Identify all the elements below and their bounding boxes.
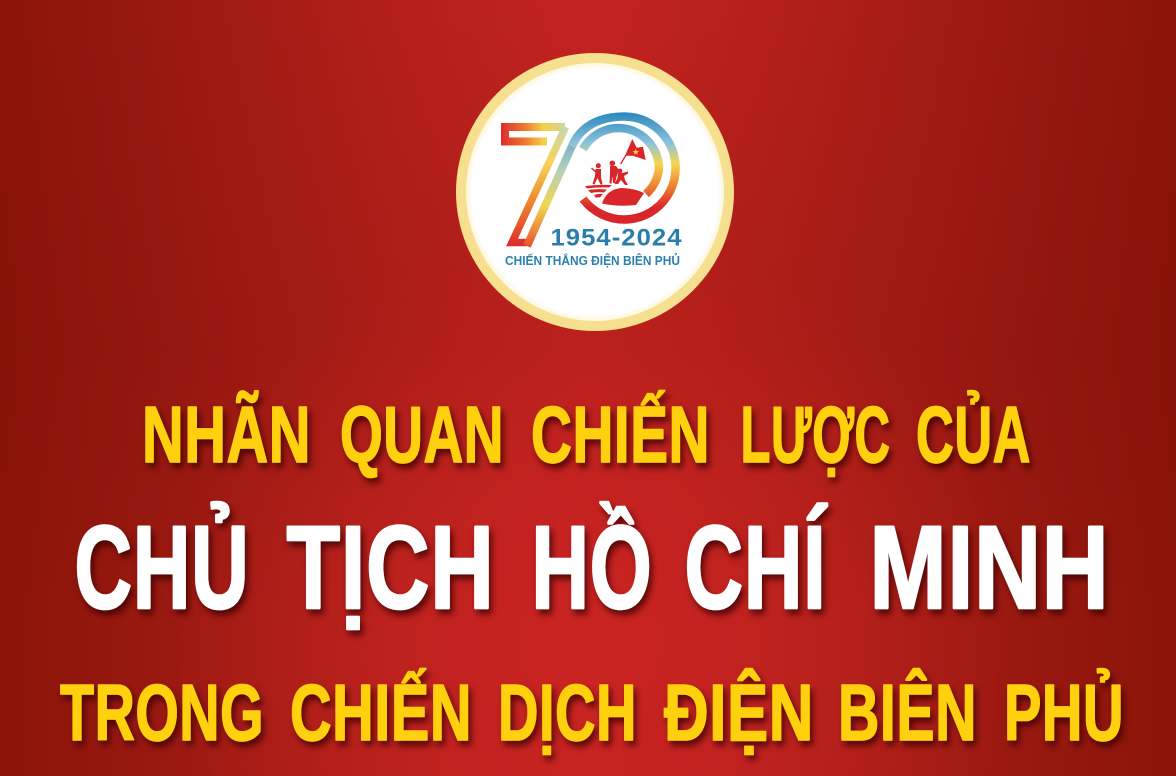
title line 3: TRONG (60, 668, 264, 757)
title line 2: CHÍ (684, 502, 828, 634)
title line 3 (60, 668, 1124, 757)
victory text: CHIẾN THẮNG ĐIỆN BIÊN PHỦ (505, 253, 680, 268)
title line 3: BIÊN (838, 668, 977, 757)
title line 2: CHỦ (74, 501, 250, 634)
logo disc with pale gold rim (456, 53, 734, 331)
title line 1: CỦA (916, 390, 1031, 479)
title line 1: LƯỢC (740, 390, 890, 479)
title line 2: MINH (870, 502, 1110, 634)
title line 3: DỊCH (498, 668, 637, 757)
title line 1: NHÃN (142, 390, 311, 479)
title line 1: QUAN (340, 390, 504, 479)
title line 3: CHIẾN (290, 668, 472, 757)
title line 2: HỒ (532, 501, 652, 634)
logo: 70 years Dien Bien Phu victory emblem (456, 53, 734, 331)
title line 2: TỊCH (286, 502, 494, 634)
years text: 1954-2024 (550, 224, 682, 252)
title line 1: CHIẾN (531, 390, 710, 479)
flag (621, 139, 646, 164)
hill and field stripes (585, 185, 644, 206)
title line 3: PHỦ (1004, 668, 1124, 757)
title line 3: ĐIỆN (664, 668, 814, 757)
numeral 7 (505, 127, 566, 242)
soldiers (592, 160, 628, 185)
title line 1 (142, 390, 1031, 479)
title line 2 (74, 501, 1110, 634)
numeral 0: concentric arcs (527, 116, 676, 246)
